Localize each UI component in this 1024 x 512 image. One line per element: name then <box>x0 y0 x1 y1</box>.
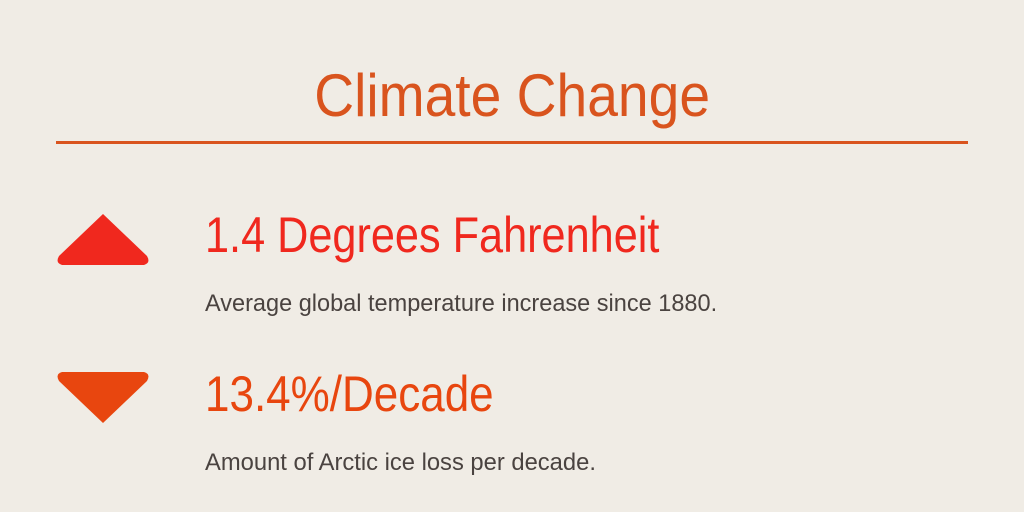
description 2: Amount of Arctic ice loss per decade. <box>205 449 596 476</box>
icon: up triangle <box>58 214 148 265</box>
icon: down triangle <box>58 372 148 423</box>
description 1: Average global temperature increase since 1880. <box>205 290 717 317</box>
heading: 13.4%/Decade: 13.4%/Decade <box>205 366 494 422</box>
stat 1: temperature <box>58 207 717 317</box>
stat 2: arctic ice <box>58 366 596 476</box>
heading: 1.4 Degrees Fahrenheit: 1.4 Degrees Fahrenheit <box>205 207 659 263</box>
title: Climate Change <box>314 62 710 129</box>
title underline <box>56 141 968 144</box>
